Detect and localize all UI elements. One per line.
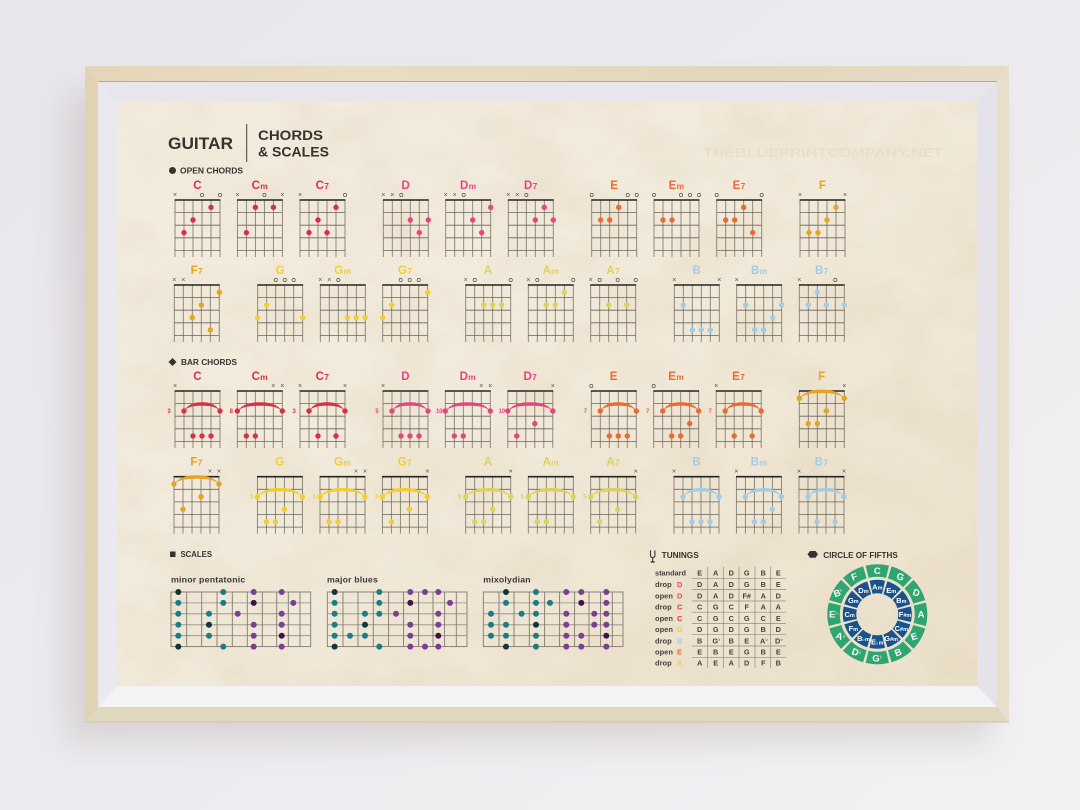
chord: Am bar: Am (543, 457, 559, 469)
tunings table: standard (655, 569, 686, 578)
chord: Gm open: × (327, 277, 331, 284)
chord: B7 open: × (797, 277, 801, 284)
chord: G open (255, 265, 305, 342)
chord: E7 open (715, 180, 763, 257)
tunings table: drop (655, 580, 672, 589)
tunings table: open (655, 625, 673, 634)
icon: circle of fifths marker (808, 551, 818, 558)
tunings table: G (713, 614, 719, 623)
tunings table: E (697, 569, 702, 578)
chord: F open (798, 180, 847, 257)
circle of fifths wheel: B (832, 587, 842, 600)
tunings table: D (729, 591, 734, 600)
chord: B7 open (797, 265, 847, 342)
chord: E7 bar: E7 (732, 371, 745, 383)
chord: E7 open: E7 (733, 180, 746, 192)
circle of fifths wheel: Dm (858, 586, 869, 595)
chord: B7 bar: × (842, 469, 846, 476)
chord: Cm bar (230, 371, 285, 448)
tunings table: D (775, 636, 780, 645)
chord: A7 open (589, 265, 637, 342)
circle of fifths wheel: E♭m (871, 638, 884, 647)
tunings table: C (697, 614, 703, 623)
picture frame (85, 66, 1009, 722)
chord: Am bar: 5 (521, 495, 525, 501)
circle of fifths wheel: G (895, 571, 905, 584)
chord: F7 open: F7 (191, 265, 203, 277)
tunings table: E (744, 636, 749, 645)
circle of fifths wheel: ♭ (835, 611, 838, 617)
panel: tunings (650, 550, 786, 668)
chord: A bar: A (484, 457, 493, 469)
chord: Dm open: × (453, 192, 457, 199)
chord: B7 bar: B7 (815, 457, 828, 469)
chord: D7 bar: D7 (523, 371, 537, 383)
chord: C7 open: C7 (316, 180, 329, 192)
chord: G bar (250, 457, 305, 534)
circle of fifths wheel: E (829, 610, 835, 621)
panel: bar chords (167, 358, 847, 534)
chord: D open: × (390, 192, 394, 199)
tunings table: D (776, 625, 781, 634)
chord: A7 bar: × (634, 469, 638, 476)
tunings table: G (744, 569, 750, 578)
tunings table: G (744, 580, 750, 589)
circle of fifths wheel: ♭ (880, 654, 883, 660)
tunings table: A (761, 591, 767, 600)
tunings table: open (655, 591, 673, 600)
chord: Bm open: Bm (751, 265, 768, 277)
heading: open chords: OPEN CHORDS (180, 166, 244, 176)
chord: Gm open: Gm (334, 265, 351, 277)
chord: G open: G (276, 265, 285, 277)
chord: F7 bar: × (217, 469, 221, 476)
chord: Dm bar: × (488, 383, 492, 390)
chord: F7 open (172, 265, 222, 342)
chord: A7 bar: 5 (583, 495, 587, 501)
chord: B open: × (717, 277, 721, 284)
chord: F7 bar: F7 (190, 457, 203, 469)
chord: G7 open: G7 (398, 265, 412, 277)
tunings table: ♭ (765, 637, 768, 643)
chord: Em bar (646, 371, 701, 448)
circle of fifths wheel: D (911, 587, 921, 600)
tunings table: E (697, 648, 702, 656)
chord: Em open: Em (669, 180, 685, 192)
tunings table: A (776, 603, 782, 612)
chord: A7 open: × (589, 277, 593, 284)
tunings table: F (761, 659, 766, 668)
chord: E bar: 7 (584, 409, 588, 415)
chord: E7 bar (709, 371, 764, 448)
chord: G7 bar: × (425, 469, 429, 476)
chord: D bar (375, 371, 431, 448)
tunings table: D (697, 625, 702, 634)
chord: D7 bar: 10 (498, 409, 506, 415)
chord: B7 bar: × (797, 469, 801, 476)
chord: Gm bar: Gm (334, 457, 351, 469)
chord: C bar: × (173, 383, 177, 390)
chord: E7 bar: 7 (709, 409, 713, 415)
chord: F open: F (819, 180, 826, 192)
chord: Dm bar: 10 (436, 409, 443, 415)
chord: Gm open (318, 265, 368, 342)
tunings table: D (677, 580, 683, 589)
chord: C open: × (173, 192, 177, 199)
chord: C7 bar: × (343, 383, 347, 390)
panel: circle of fifths (808, 551, 927, 664)
tunings table: A (761, 603, 767, 612)
chord: Em bar: Em (668, 371, 684, 383)
chord: C open: C (193, 180, 202, 192)
chord: E open: E (610, 180, 618, 192)
circle of fifths wheel: ♭ (858, 650, 863, 656)
chord: Gm open: × (318, 277, 322, 284)
chord: D open: D (401, 180, 410, 192)
circle of fifths wheel: A (918, 610, 925, 621)
chord: Gm bar (312, 457, 368, 534)
chord: F7 bar (171, 457, 222, 534)
tunings table: G (677, 625, 683, 634)
chord: Gm bar: × (363, 469, 367, 476)
chord: E bar (584, 371, 639, 448)
tunings table: D (677, 591, 683, 600)
mat board (98, 82, 997, 707)
chord: Cm bar: × (271, 383, 275, 390)
chord: F open: × (798, 192, 802, 199)
tunings table: B (697, 636, 702, 645)
tunings table: drop (655, 636, 672, 645)
chord: D open: × (381, 192, 385, 199)
chord: Cm bar: Cm (252, 371, 268, 383)
tunings table: A (729, 659, 735, 668)
chord: D7 bar: × (551, 383, 555, 390)
tunings table: G (744, 614, 750, 623)
tunings table: D (729, 625, 734, 634)
circle of fifths wheel: Bm (896, 596, 907, 605)
watermark: THEBLUEPRINTCOMPANY.NET (703, 145, 943, 160)
chord: A bar: 5 (458, 495, 462, 501)
tunings table: C (761, 614, 767, 623)
chord: F bar: F (818, 371, 825, 383)
chord: Am open (526, 265, 575, 342)
heading: bar chords: BAR CHORDS (181, 358, 238, 367)
chord: B open (672, 265, 721, 342)
chord: A open: A (484, 265, 493, 277)
tunings table: G (713, 603, 719, 612)
tunings table: F (744, 603, 749, 612)
tunings table: G (744, 625, 750, 634)
chord: Bm open (735, 265, 784, 342)
chord: E7 bar: × (714, 383, 718, 390)
tunings table: B (761, 580, 766, 589)
chord: C bar: 3 (167, 409, 171, 415)
fretboard: major blues (327, 589, 467, 650)
chord: B7 bar (797, 457, 847, 534)
tunings table: D (729, 569, 734, 578)
title: GUITAR (168, 134, 233, 153)
tunings table: D (729, 580, 734, 589)
chord: F bar (797, 371, 847, 448)
tunings table: C (697, 603, 703, 612)
chord: G7 bar: G7 (398, 457, 412, 469)
chord: Em bar: 7 (646, 409, 650, 415)
tunings table: B (761, 648, 766, 656)
chord: A7 open: A7 (606, 265, 620, 277)
chord: Cm open (235, 180, 284, 257)
chord: G7 bar (375, 457, 430, 534)
tunings table: A (697, 659, 703, 668)
chord: B7 open: B7 (815, 265, 829, 277)
chord: D bar: D (401, 371, 410, 383)
tunings table: drop (655, 603, 672, 612)
scale title: major blues: major blues (327, 574, 378, 584)
chord: C7 open (298, 180, 347, 257)
chord: B open: × (672, 277, 676, 284)
circle of fifths wheel: C (874, 566, 881, 577)
chord: Bm bar (734, 457, 784, 534)
tunings table: E (776, 648, 781, 656)
tunings table: ♭ (718, 637, 721, 643)
circle of fifths wheel: B♭m (857, 634, 870, 643)
chord: Cm open: × (235, 192, 239, 199)
circle of fifths wheel: F (850, 571, 859, 584)
chord: B open: B (692, 265, 701, 277)
scale title: minor pentatonic: minor pentatonic (171, 574, 246, 584)
fretboard: minor pentatonic (171, 589, 311, 650)
frame shadow (66, 92, 991, 742)
circle of fifths wheel: D (850, 646, 860, 659)
chord: Cm open: × (280, 192, 284, 199)
chord: C7 bar: × (298, 383, 302, 390)
circle of fifths wheel: Gm (848, 596, 859, 605)
tunings table: B (713, 648, 718, 656)
title: CHORDS (258, 128, 323, 143)
chord: A bar (458, 457, 513, 534)
fretboard: mixolydian (483, 589, 623, 650)
chord: F bar: × (842, 383, 846, 390)
tunings table: A (760, 636, 765, 645)
chord: Am bar (521, 457, 576, 534)
circle of fifths wheel (827, 564, 927, 664)
scale title: mixolydian: mixolydian (483, 574, 531, 584)
chord: Bm bar: × (734, 469, 738, 476)
chord: D7 open: × (515, 192, 519, 199)
tunings table: E (776, 614, 781, 623)
chord: D7 bar (498, 371, 556, 448)
chord: C7 bar (292, 371, 348, 448)
chord: A7 bar: A7 (606, 457, 620, 469)
chord: B bar: B (692, 457, 701, 469)
tunings table: F# (742, 591, 751, 600)
circle of fifths wheel: Fm (849, 624, 858, 633)
heading: tunings: TUNINGS (662, 551, 699, 560)
chord: C bar: C (193, 371, 202, 383)
circle of fifths wheel: Am (872, 582, 883, 591)
heading: circle of fifths: CIRCLE OF FIFTHS (823, 551, 898, 560)
chord: G bar: 3 (250, 495, 254, 501)
circle of fifths wheel: G#m (884, 634, 898, 643)
chord: Dm open (444, 180, 493, 257)
tunings table: B (677, 636, 683, 645)
tunings table: E (776, 569, 781, 578)
tunings table: D (744, 659, 749, 668)
chord: C open (173, 180, 222, 257)
circle of fifths wheel: A (834, 630, 844, 643)
chord: Bm bar: Bm (751, 457, 767, 469)
tunings table: C (677, 614, 683, 623)
tunings table: A (713, 580, 719, 589)
chord: Am open: × (526, 277, 530, 284)
circle of fifths wheel: G (872, 653, 880, 664)
chord: Dm open: Dm (460, 180, 477, 192)
chord: D7 open: D7 (524, 180, 538, 192)
chord: B bar (672, 457, 722, 534)
chord: Cm bar: × (280, 383, 284, 390)
chord: F7 open: × (181, 277, 185, 284)
tunings table: A (677, 659, 683, 668)
chord: C bar (167, 371, 223, 448)
chord: Gm bar: 3 (312, 495, 316, 501)
chord: Cm bar: 8 (230, 409, 234, 415)
tunings table: E (729, 648, 734, 656)
chord: Am open: Am (543, 265, 559, 277)
tunings table: G (713, 625, 719, 634)
title: & SCALES (258, 145, 329, 160)
circle of fifths wheel: E (909, 631, 919, 643)
chord: D open (381, 180, 431, 257)
tunings table: C (729, 603, 735, 612)
chord: A open: × (464, 277, 468, 284)
chord: A open (464, 265, 512, 342)
tunings table: C (677, 603, 683, 612)
tunings table: D (697, 580, 702, 589)
circle of fifths wheel: ♭ (839, 587, 844, 594)
chord: E open (590, 180, 638, 257)
panel: scales (170, 550, 623, 650)
tunings table: C (729, 614, 735, 623)
circle of fifths wheel: ♭ (842, 634, 847, 640)
icon: tuning fork (650, 550, 655, 562)
chord: D7 open (506, 180, 556, 257)
tunings table: E (677, 648, 682, 656)
tunings table: D (776, 591, 781, 600)
tunings table: A (713, 591, 719, 600)
tunings table: G (744, 648, 750, 656)
circle of fifths wheel: F#m (899, 610, 911, 619)
chord: D7 open: × (506, 192, 510, 199)
tunings table: G (712, 636, 718, 645)
chord: D bar: × (381, 383, 385, 390)
chord: Em open (652, 180, 701, 257)
chord: Dm bar: × (479, 383, 483, 390)
chord: Dm open: × (444, 192, 448, 199)
circle of fifths wheel: B (893, 647, 904, 659)
tunings table: A (713, 569, 719, 578)
tunings table: ♭ (780, 637, 783, 643)
tunings table: B (776, 659, 781, 668)
chord: F open: × (843, 192, 847, 199)
heading: scales: SCALES (180, 550, 213, 559)
tunings table: D (697, 591, 702, 600)
chord: C7 open: × (298, 192, 302, 199)
tunings table (655, 567, 786, 668)
tunings table: B (761, 569, 766, 578)
chord: G7 open (380, 265, 430, 342)
tunings table: E (713, 659, 718, 668)
chord: D bar: 5 (375, 409, 379, 415)
chord: C7 bar: C7 (316, 371, 329, 383)
tunings table: B (729, 636, 734, 645)
chord: G bar: G (275, 457, 285, 469)
chord: C7 bar: 3 (292, 409, 296, 415)
panel: open chords (169, 166, 847, 342)
chord: Gm bar: × (354, 469, 358, 476)
chord: Dm bar (436, 371, 493, 448)
chord: G7 bar: 3 (375, 495, 379, 501)
poster paper (117, 102, 977, 686)
chord: A bar: × (509, 469, 513, 476)
chord: E bar: E (610, 371, 618, 383)
tunings table: open (655, 614, 673, 623)
chord: Bm open: × (735, 277, 739, 284)
circle of fifths wheel: Em (886, 586, 896, 595)
circle of fifths wheel: C#m (895, 624, 908, 633)
chord: Dm bar: Dm (460, 371, 476, 383)
chord: F7 bar: × (208, 469, 212, 476)
tunings table: drop (655, 659, 672, 668)
chord: B bar: × (672, 469, 676, 476)
title (168, 124, 329, 162)
chord: F7 open: × (172, 277, 176, 284)
tunings table: open (655, 648, 673, 656)
circle of fifths wheel: Cm (844, 610, 855, 619)
tunings table: E (776, 580, 781, 589)
chord: A7 bar (583, 457, 638, 534)
chord: Cm open: Cm (252, 180, 268, 192)
tunings table: B (761, 625, 766, 634)
